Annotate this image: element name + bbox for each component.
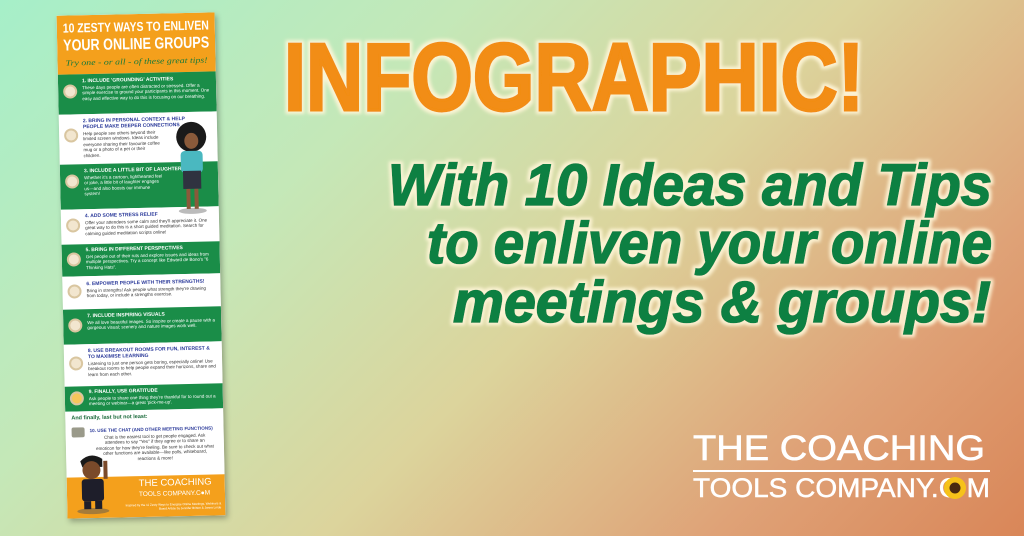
tip 4: Offer your attendees some calm and they'll appreciate it. One great way to do this is a short guided meditation. Search for calming guided meditation scripts online!: [85, 218, 207, 236]
tip 3: [60, 161, 219, 210]
tip 4: [61, 206, 219, 245]
tip 10: Chat is the easiest tool to get people engaged. Ask attendees to say "Yes" if they agree or to share an emoticon for how they're feeling. Be sure to check out what other functions are available—like polls, whiteboard, reactions & more!: [96, 433, 214, 461]
tip 4: 4. ADD SOME STRESS RELIEF: [85, 212, 158, 219]
tip 10: And finally, last but not least:: [71, 414, 148, 422]
tip 6: Bring in strengths! Ask people what strength they're drawing from today, or include a strengths exercise.: [86, 286, 206, 299]
logo: THE COACHING: [693, 429, 985, 468]
panel footer: TOOLS COMPANY.C●M: [139, 490, 210, 498]
panel header: Try one - or all - of these great tips!: [65, 55, 208, 68]
illustration: woman: [176, 122, 207, 214]
tip 1: These days people are often distracted or stressed. Offer a simple exercise to ground your participants in this moment. One easy and effective way to do this is focusing on our breathing.: [82, 83, 209, 101]
illustration: man: [77, 456, 110, 514]
title: INFOGRAPHIC!: INFOGRAPHIC!: [284, 24, 864, 131]
tip 7: [63, 306, 222, 345]
tip 7: We all love beautiful images. So inspire or create a pause with a gorgeous visual; scenery and nature images work well.: [87, 317, 215, 331]
tip 10: [65, 408, 225, 478]
tip 8: TO MAXIMISE LEARNING: [88, 353, 149, 360]
subtitle: to enliven your online: [427, 211, 992, 276]
panel footer: [67, 474, 225, 519]
tip 9: [65, 383, 223, 412]
tip 9: 9. FINALLY, USE GRATITUDE: [89, 388, 158, 395]
tip 6: [62, 273, 221, 310]
tip 5: Get people out of their ruts and explore issues and ideas from multiple perspectives. Try a concept like Edward de Bono's "6 Thinking Hats".: [86, 252, 209, 270]
panel footer: Inspired by the 11 Zesty Ways to Energise Online Meetings, Webinars & Board Article by Jennifer Britton & Janna Lorde: [126, 501, 221, 511]
icon: sunflower: [944, 477, 966, 499]
tip 2: 2. BRING IN PERSONAL CONTEXT & HELP: [83, 116, 185, 124]
tip 5: 5. BRING IN DIFFERENT PERSPECTIVES: [86, 245, 183, 253]
tip 1: 1. INCLUDE 'GROUNDING' ACTIVITIES: [82, 76, 173, 84]
infographic panel: [57, 12, 225, 519]
tip 9: Ask people to share one thing they're thankful for to round out a meeting or webinar—a great 'pick-me-up'.: [89, 393, 216, 407]
tip 3: Whether it's a cartoon, lighthearted feel or joke, a little bit of laughter engages us—and also boosts our immune system!: [84, 174, 162, 196]
logo: [693, 429, 990, 503]
subtitle: With 10 Ideas and Tips: [388, 153, 992, 218]
tip 2: Help people see others beyond their limited screen windows. Ideas include everyone sharing their favourite coffee mug or a photo of a pet or their children.: [83, 130, 160, 158]
tip 6: 6. EMPOWER PEOPLE WITH THEIR STRENGTHS!: [86, 279, 204, 287]
tip 8: [64, 341, 223, 387]
panel header: [57, 12, 216, 75]
panel footer: THE COACHING: [139, 477, 212, 489]
tip 1: [58, 71, 217, 115]
tip 8: Listening to just one person gets boring, especially online! Use breakout rooms to help people expand their horizons, share and learn from each other.: [88, 358, 216, 377]
tip 2: [59, 111, 218, 165]
tip 5: [62, 241, 220, 277]
tip 8: 8. USE BREAKOUT ROOMS FOR FUN, INTEREST &: [88, 346, 210, 354]
logo: TOOLS COMPANY.C M: [693, 473, 990, 503]
tip 2: PEOPLE MAKE DEEPER CONNECTIONS: [83, 122, 180, 130]
tip 10: 10. USE THE CHAT (AND OTHER MEETING FUNCTIONS): [90, 425, 213, 433]
tip 3: 3. INCLUDE A LITTLE BIT OF LAUGHTER: [84, 166, 182, 174]
tip 7: 7. INCLUDE INSPIRING VISUALS: [87, 311, 165, 319]
subtitle: meetings & groups!: [453, 270, 991, 335]
